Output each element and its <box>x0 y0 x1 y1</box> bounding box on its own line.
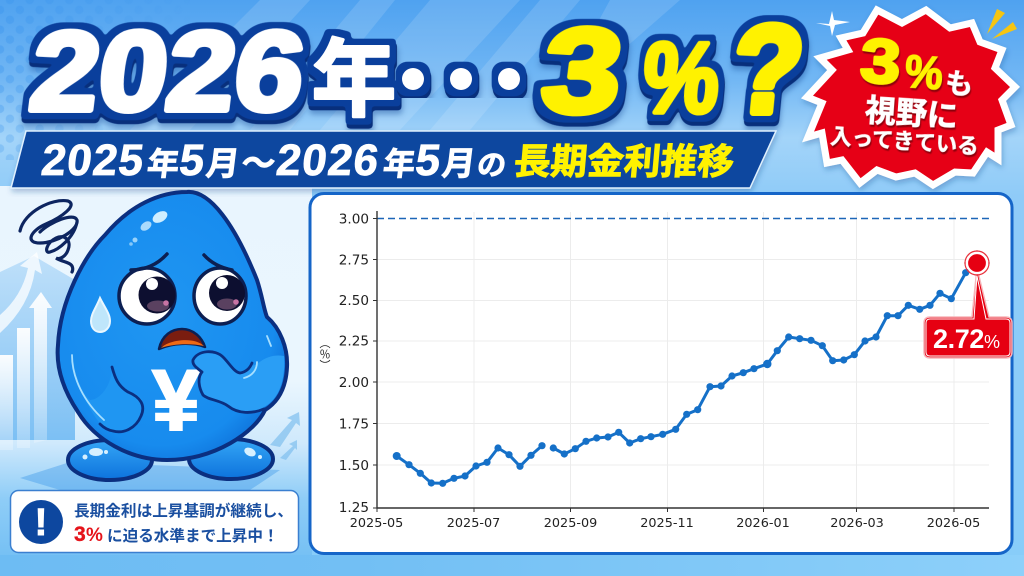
title question mark: ? <box>726 1 809 139</box>
subtitle white text: 2025 <box>39 136 147 185</box>
callout value: 2.72% <box>933 324 1000 354</box>
starburst text <box>829 25 986 159</box>
subtitle white text: 5 <box>413 136 443 185</box>
left foot <box>68 440 152 480</box>
yield line <box>393 263 977 487</box>
grid lines <box>377 212 989 508</box>
y axis labels: 3.00 <box>339 212 369 228</box>
y axis unit: （％） <box>318 338 330 370</box>
note box <box>10 490 298 552</box>
title digits 2026: 2026 <box>24 8 311 134</box>
left hand outline <box>100 367 143 432</box>
x axis labels: 2025-07 <box>447 516 500 531</box>
x axis labels: 2026-05 <box>927 516 980 531</box>
3 percent dashed line <box>377 218 989 220</box>
arm edge highlight <box>72 336 271 420</box>
subtitle white text: 5 <box>177 136 207 185</box>
subtitle white text: 〜 <box>239 145 278 183</box>
droplet body <box>58 192 287 460</box>
body highlights <box>129 209 169 246</box>
foot highlights <box>82 446 262 460</box>
left arm and hand <box>72 353 143 432</box>
y axis labels: 2.25 <box>339 334 369 350</box>
right eye <box>194 268 246 324</box>
note line two: 3 <box>74 523 86 546</box>
right hand outline <box>193 352 264 412</box>
latest value callout 2.72% <box>924 250 1012 358</box>
exclamation icon <box>19 500 63 544</box>
dizzy spiral <box>20 201 77 272</box>
subtitle yellow text: 長期金利推移 <box>512 141 736 182</box>
x axis labels: 2025-11 <box>640 516 694 531</box>
subtitle white text: の <box>475 150 508 182</box>
y axis labels: 2.00 <box>339 375 369 391</box>
x axis labels: 2025-09 <box>544 516 597 531</box>
title percent sign: % <box>638 21 725 133</box>
y axis labels <box>339 212 369 516</box>
starburst callout <box>807 10 1015 185</box>
left eye <box>119 268 176 324</box>
subtitle white text: 2026 <box>274 136 382 185</box>
yen symbol: ¥ <box>152 353 200 449</box>
subtitle white text: 年 <box>381 146 418 182</box>
right foot <box>189 439 273 479</box>
y axis labels: 1.25 <box>339 500 369 516</box>
axes <box>377 211 989 508</box>
right arm and hand <box>193 352 284 412</box>
x axis labels: 2026-01 <box>736 516 790 531</box>
title dots <box>402 68 520 90</box>
subtitle banner <box>11 131 776 188</box>
title kanji 年: 年 <box>312 33 396 127</box>
subtitle white text: 年 <box>145 146 182 182</box>
subtitle white text: 月 <box>204 146 242 183</box>
note line one: 長期金利は上昇基調が継続し、 <box>74 501 293 520</box>
title numeral 3: 3 <box>535 4 630 138</box>
y axis labels: 2.50 <box>339 293 369 309</box>
subtitle white text: 月 <box>440 146 478 183</box>
sparkle and accent marks <box>816 9 1017 39</box>
y axis labels: 2.75 <box>339 252 369 268</box>
note line two: に迫る水準まで上昇中！ <box>107 526 279 545</box>
eyebrows <box>131 254 232 270</box>
axis ticks <box>373 218 954 512</box>
x axis labels: 2026-03 <box>830 516 884 531</box>
mascot: worried yen water drop <box>20 192 287 480</box>
starburst text: 入ってきている <box>829 125 980 159</box>
highlighted marker <box>964 250 990 276</box>
y axis labels: 1.50 <box>339 458 369 474</box>
starburst text: 3 <box>858 27 903 98</box>
x axis labels: 2025-05 <box>350 516 403 531</box>
mouth <box>159 329 205 349</box>
note line two: % <box>86 525 103 546</box>
starburst text: % <box>903 45 945 99</box>
starburst text: 視野に <box>864 93 959 134</box>
exclamation icon: ! <box>35 502 47 544</box>
data points <box>393 269 969 487</box>
starburst text: も <box>944 67 974 100</box>
title: 2026年・・・3%? <box>24 1 809 139</box>
y axis labels: 1.75 <box>339 416 369 432</box>
background rising arrows and bars <box>0 252 300 490</box>
sweat drop <box>91 298 110 332</box>
chart panel <box>310 194 1012 554</box>
x axis labels <box>350 516 980 531</box>
